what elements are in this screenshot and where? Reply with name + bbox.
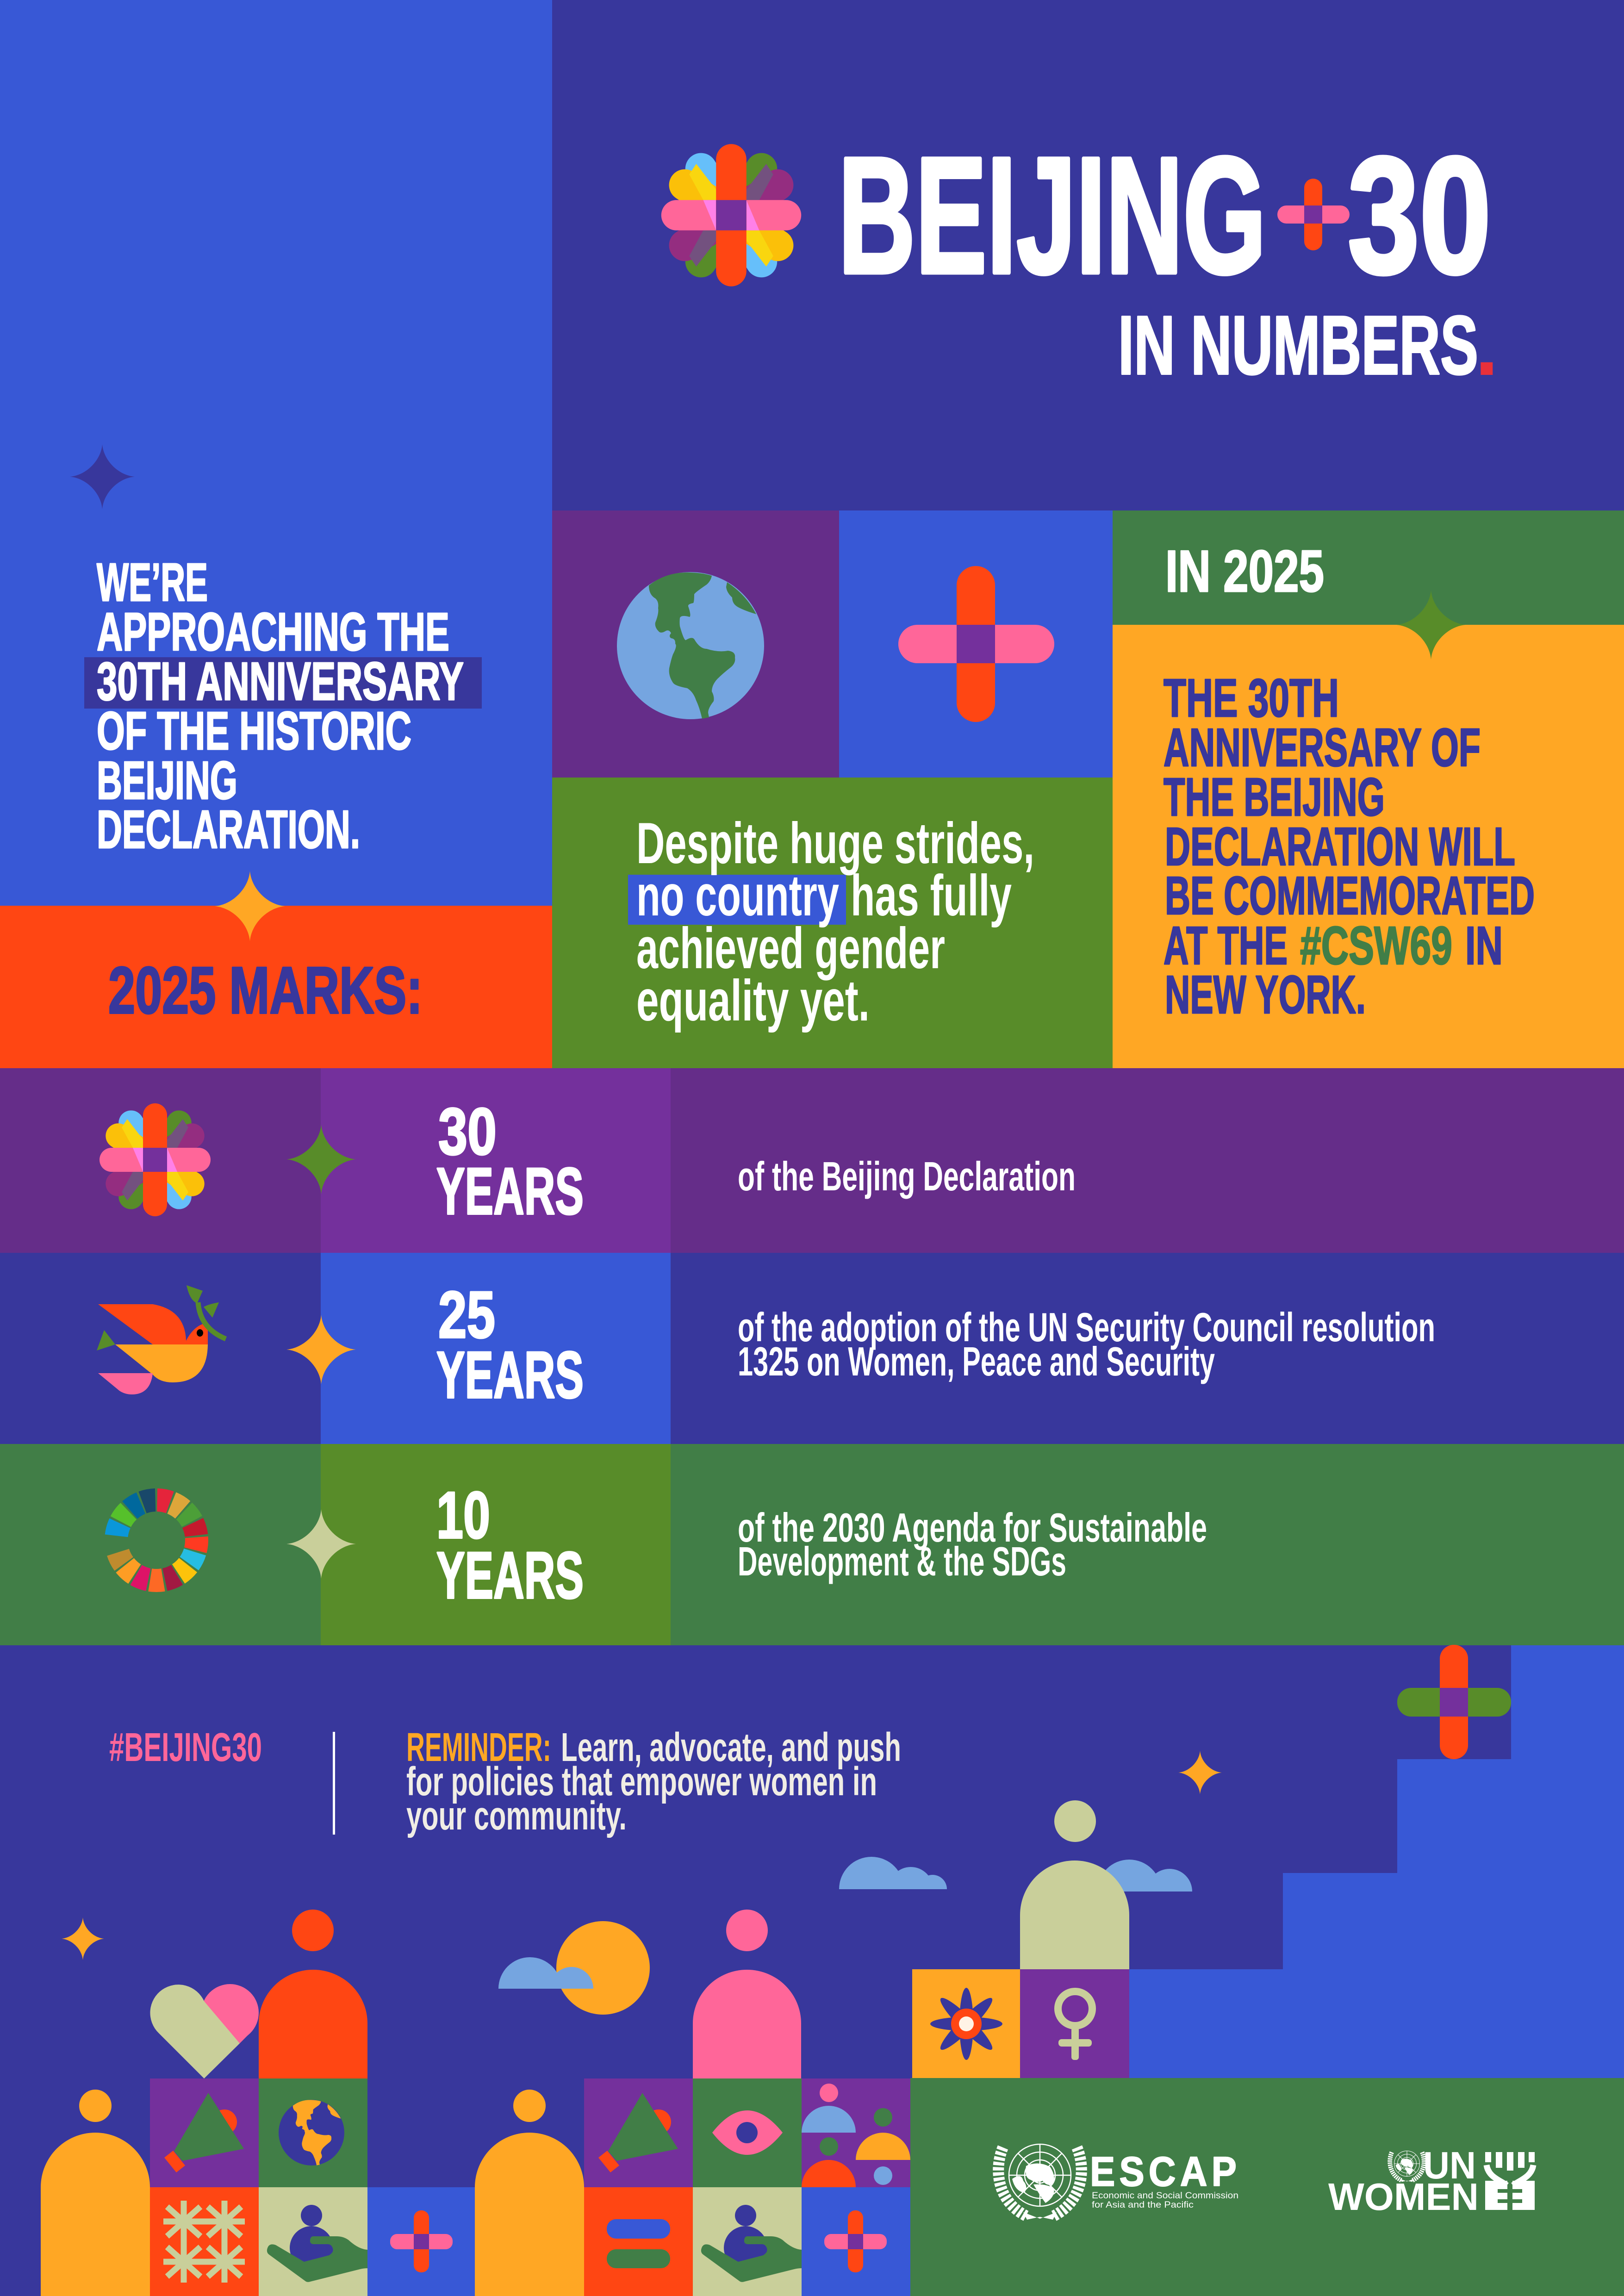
panel: blue left column [0, 0, 552, 906]
tile: asterisk pattern [150, 2187, 259, 2296]
star: orange [215, 871, 285, 941]
icon: peace dove [97, 1285, 226, 1394]
panel: orange commemoration [1113, 625, 1624, 1068]
highlight [84, 657, 482, 709]
star: navy [70, 444, 135, 509]
stat: 25 years [436, 1278, 584, 1412]
tile: female symbol [1020, 1969, 1129, 2078]
logo: UN Women: UN [1423, 2144, 1476, 2187]
title: 30 [1348, 123, 1491, 308]
stat: 30 years: YEARS [436, 1155, 584, 1228]
panel: green logo strip [910, 2078, 1624, 2296]
description: 25 years: 1325 on Women, Peace and Security [738, 1338, 1215, 1384]
highlight: no country [628, 875, 846, 925]
text block: approaching anniversary: DECLARATION. [97, 799, 360, 859]
stat: 25 years: 25 [438, 1278, 495, 1352]
stat: 10 years: 10 [436, 1479, 490, 1552]
panel: blue plus tile [839, 510, 1113, 778]
star: left orange [62, 1917, 104, 1960]
panel: row 30 years [0, 1068, 1624, 1253]
text block: reminder: REMINDER: [406, 1725, 551, 1770]
logo: ESCAP: for Asia and the Pacific [1092, 2200, 1194, 2210]
figure: pink [693, 1910, 801, 2078]
text block: reminder: for policies that empower women in [406, 1759, 877, 1804]
subtitle: . [1475, 298, 1499, 393]
divider [333, 1732, 335, 1835]
staircase [1129, 1645, 1624, 2078]
panel: green in 2025 [1113, 510, 1624, 625]
hashtag: #BEIJING30 [109, 1725, 262, 1770]
cloud: centre [839, 1857, 947, 1889]
figure: orange centre [475, 2090, 584, 2296]
tile: megaphone 2 [584, 2078, 693, 2187]
text block: commemoration: NEW YORK. [1165, 964, 1366, 1025]
stat: 10 years: YEARS [436, 1539, 584, 1612]
star: green [1396, 590, 1466, 660]
panel: row 25 years [0, 1253, 1624, 1444]
text block: despite huge strides: no country [636, 864, 839, 928]
star: row 1 [286, 1125, 356, 1194]
icon: heart [150, 1984, 259, 2078]
tile: small globe [259, 2078, 367, 2187]
logo: UN Women [1328, 2144, 1535, 2218]
text block: commemoration [1164, 668, 1535, 1025]
stat: 30 years [436, 1095, 584, 1228]
text block: approaching anniversary: 30TH ANNIVERSARY [97, 651, 464, 711]
text block: despite huge strides: equality yet. [636, 969, 870, 1033]
tile: caring hand 1 [259, 2187, 367, 2296]
panel: row 10 years [0, 1444, 1624, 1645]
logo: ESCAP: ESCAP [1090, 2149, 1241, 2195]
tile: community figures [802, 2078, 910, 2187]
text block: reminder [406, 1725, 901, 1838]
stat: 30 years: 30 [438, 1095, 497, 1169]
text block: despite huge strides [628, 811, 1034, 1033]
text block: commemoration: #CSW69 [1300, 915, 1452, 976]
heading: in 2025: IN 2025 [1165, 538, 1324, 604]
text block: commemoration: THE BEIJING [1164, 767, 1385, 827]
text block: approaching anniversary: BEIJING [97, 750, 237, 810]
description: 30 years: of the Beijing Declaration [738, 1153, 1076, 1199]
title: BEIJING [838, 123, 1266, 308]
panel: navy title header [552, 0, 1624, 510]
star: top right orange [1178, 1751, 1222, 1794]
text block: despite huge strides: has fully [851, 864, 1012, 928]
panel: navy footer scene [0, 1645, 1624, 2296]
cloud: over sun [498, 1957, 593, 1989]
tile: blue plus 1 [367, 2187, 475, 2296]
text block: commemoration: AT THE [1164, 915, 1288, 976]
tile: caring hand 2 [693, 2187, 802, 2296]
panel: orange-red 2025 marks [0, 906, 552, 1068]
logo: ESCAP [998, 2144, 1241, 2220]
text block: commemoration: THE 30TH [1164, 668, 1339, 728]
icon: title plus [1277, 179, 1350, 250]
tile: eye [693, 2078, 802, 2187]
figure: orange left [41, 2090, 150, 2296]
text block: despite huge strides: Despite huge strides, [636, 811, 1034, 876]
text block: commemoration: IN [1465, 915, 1503, 976]
tile: flower [912, 1969, 1020, 2078]
tile: equal sign [584, 2187, 693, 2296]
tile: blue plus 2 [802, 2187, 910, 2296]
icon: row flower [100, 1103, 211, 1216]
text block: reminder: Learn, advocate, and push [561, 1725, 901, 1770]
emblem: UN Women mark [1485, 2152, 1535, 2210]
text block: approaching anniversary: OF THE HISTORIC [97, 701, 411, 761]
sun [556, 1921, 650, 2015]
icon: SDG wheel [100, 1483, 213, 1597]
text block: reminder: your community. [406, 1793, 627, 1838]
description: 10 years: of the 2030 Agenda for Sustainable [738, 1505, 1207, 1550]
icon: large plus [898, 566, 1054, 722]
heading: 2025 marks: 2025 MARKS: [108, 954, 423, 1027]
text block: despite huge strides: achieved gender [636, 916, 945, 981]
text block: approaching anniversary: APPROACHING THE [97, 602, 449, 662]
text block: approaching anniversary [84, 552, 482, 859]
description: 25 years [738, 1304, 1435, 1384]
logo: UN Women: WOMEN [1328, 2175, 1479, 2218]
panel: purple globe tile [552, 510, 839, 778]
figure: red [259, 1910, 367, 2078]
logo: ESCAP: Economic and Social Commission [1092, 2191, 1238, 2201]
cloud: behind pale figure [1097, 1860, 1192, 1892]
text block: approaching anniversary: WE’RE [97, 552, 208, 612]
icon: globe [617, 572, 764, 719]
stat: 25 years: YEARS [436, 1338, 584, 1412]
header logo flower [661, 144, 801, 286]
figure: pale [1020, 1800, 1129, 1969]
stat: 10 years [436, 1479, 584, 1612]
panel: green statement [552, 778, 1113, 1068]
description: 10 years: Development & the SDGs [738, 1538, 1066, 1584]
icon: stair plus [1397, 1645, 1511, 1759]
tile: megaphone 1 [150, 2078, 259, 2187]
description: 10 years [738, 1505, 1207, 1584]
star: row 2 [286, 1315, 356, 1384]
star: row 3 [286, 1509, 356, 1579]
